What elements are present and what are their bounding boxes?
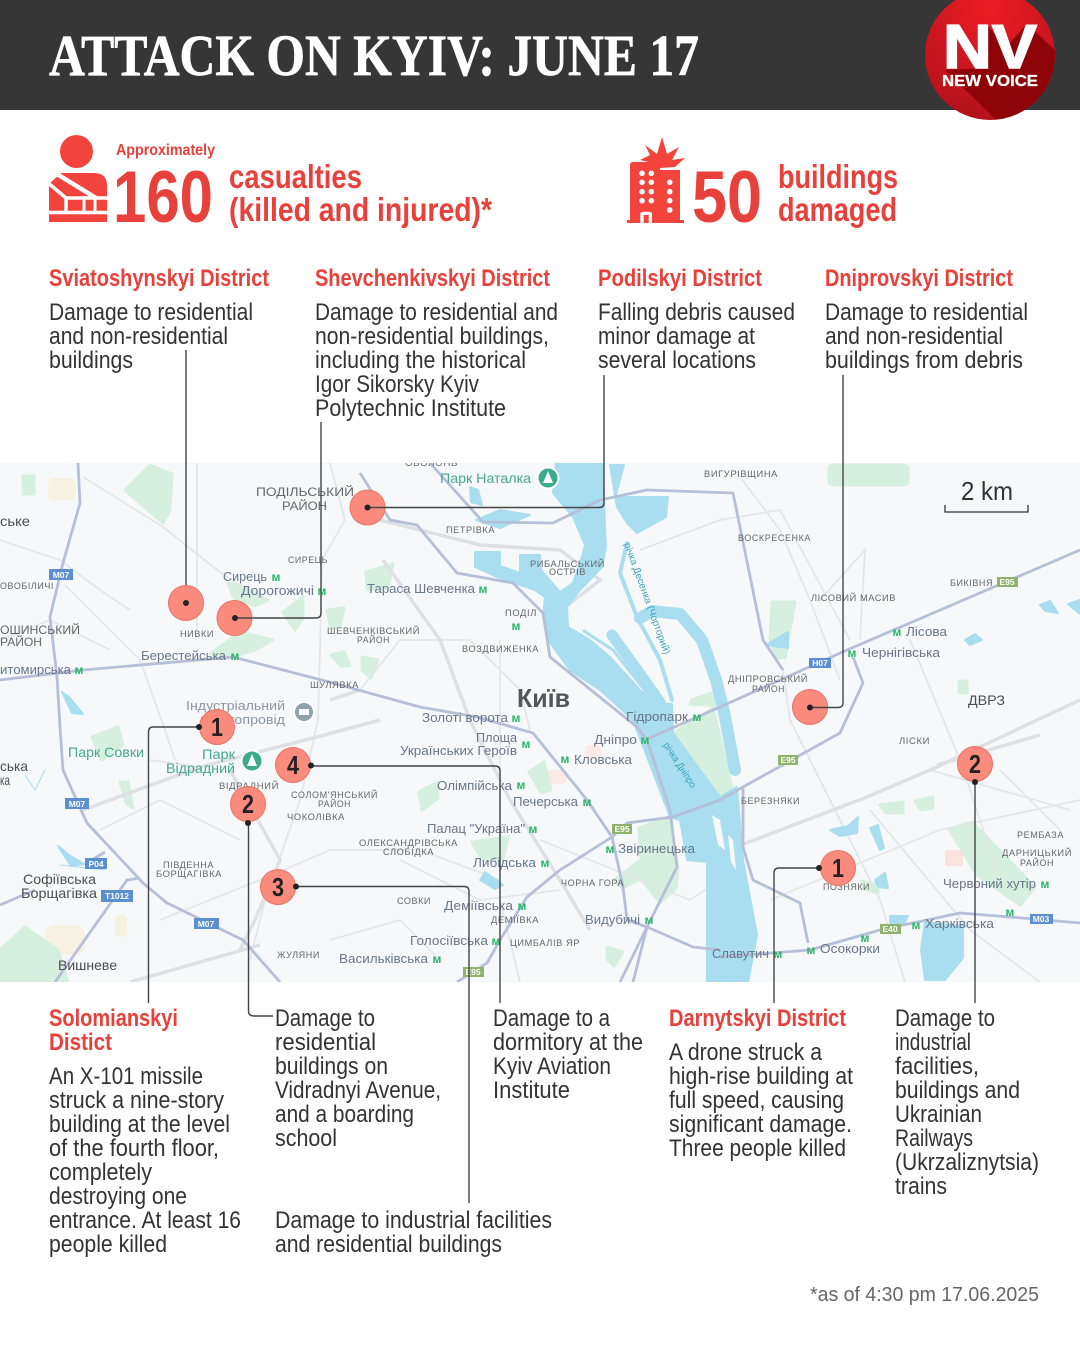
panel: Solomianskyi District: completely	[49, 1159, 152, 1186]
map place labels: ДЕМІЇВКА	[491, 915, 539, 926]
marker 3: industrial facilities	[260, 870, 469, 1203]
beige urban patches	[45, 478, 963, 955]
panel: Darnytskyi District: A drone struck a	[669, 1039, 823, 1066]
text: aviation institute damage	[493, 1005, 643, 1104]
panel: Solomianskyi District: of the fourth floor,	[49, 1135, 219, 1162]
map place labels: ЛІСОВИЙ МАСИВ	[811, 592, 896, 604]
panel: Solomianskyi District: Distict	[49, 1029, 112, 1056]
road number badges: М07	[198, 919, 215, 929]
icon: damaged building	[627, 137, 685, 223]
map place labels: Парк	[202, 746, 236, 762]
map place labels: БИКІВНЯ	[950, 578, 993, 589]
scale bar: 2 km	[945, 476, 1028, 512]
map place labels: Індустріальний	[186, 698, 285, 713]
map place labels: ОШИНСЬКИЙ	[0, 622, 80, 637]
panel: Podilskyi District: minor damage at	[598, 323, 755, 350]
map place labels: ДНІПРОВСЬКИЙ	[728, 673, 808, 685]
map place labels: Чернігівська	[862, 645, 941, 660]
text: Vidradnyi damage: Damage to	[275, 1005, 375, 1032]
road number badges: Т1012	[105, 891, 129, 901]
metro station marks: м	[433, 952, 442, 966]
map place labels: Голосіївська	[410, 933, 489, 948]
map place labels: РИБАЛЬСЬКИЙ	[530, 558, 605, 570]
panel: Shevchenkivskyi District: including the historical	[315, 347, 526, 374]
parks	[0, 465, 1035, 982]
map place labels: Сирець	[223, 569, 267, 584]
stat: buildings	[627, 137, 898, 238]
map place labels: Площа	[476, 730, 518, 745]
metro station marks: м	[512, 619, 521, 633]
metro station marks: м	[912, 918, 921, 932]
text: aviation institute damage: Kyiv Aviation	[493, 1053, 611, 1080]
text: aviation institute damage: Damage to a	[493, 1005, 611, 1032]
text: Vidradnyi damage: buildings on	[275, 1053, 388, 1080]
map place labels: Осокорки	[820, 941, 880, 956]
text: aviation institute damage: dormitory at the	[493, 1029, 643, 1056]
metro station marks: м	[641, 733, 650, 747]
map place labels: ОСТРІВ	[549, 567, 586, 578]
map place labels: річка Дніпро	[660, 741, 698, 791]
road number badges: Н07	[812, 658, 828, 668]
text: industrial facilities damage: Damage to industrial facilities	[275, 1207, 552, 1234]
map place labels: РАЙОН	[357, 634, 390, 646]
map place labels: ПІВДЕННА	[163, 860, 214, 871]
panel: Solomianskyi District: destroying one	[49, 1183, 187, 1210]
panel: Darnytskyi District: high-rise building at	[669, 1063, 853, 1090]
map place labels: Дніпро	[594, 732, 637, 747]
buildings damaged text: buildings	[778, 158, 898, 195]
map place labels: ОБОЛОНЬ	[405, 458, 458, 469]
metro station marks: м	[318, 584, 327, 598]
road number badges: Е95	[999, 577, 1015, 587]
map place labels: ЧОКОЛІВКА	[287, 812, 345, 823]
map place labels: СОЛОМ'ЯНСЬКИЙ	[291, 789, 378, 801]
map place labels: Дорогожичі	[241, 583, 314, 598]
metro station marks: м	[583, 795, 592, 809]
title: ATTACK ON KYIV: JUNE 17	[49, 23, 699, 88]
metro station marks: м	[561, 752, 570, 766]
panel: Dniprovskyi District: Dniprovskyi District	[825, 265, 1013, 292]
map place labels: ська	[0, 758, 28, 774]
panel: Darnytskyi District: Darnytskyi District	[669, 1005, 846, 1032]
map place labels: Харківська	[925, 916, 995, 931]
metro station marks: м	[693, 710, 702, 724]
map place labels: Тараса Шевченка	[367, 581, 476, 596]
road number badges: М07	[69, 799, 86, 809]
map place labels: ОЛЕКСАНДРІВСЬКА	[359, 838, 458, 849]
map place labels: ПЕТРІВКА	[446, 525, 495, 536]
panel: Podilskyi District: Podilskyi District	[598, 265, 762, 292]
panel: Solomianskyi District: building at the level	[49, 1111, 230, 1138]
marker 1: Darnytskyi	[774, 850, 856, 1003]
road number badges: Е95	[614, 824, 630, 834]
scale bar: 2 km: 2 km	[961, 476, 1013, 506]
metro station marks: м	[75, 663, 84, 677]
metro station marks: м	[861, 931, 870, 945]
metro station marks: м	[522, 737, 531, 751]
marker 1: Darnytskyi: 1	[832, 853, 844, 883]
map place labels: ШЕВЧЕНКІВСЬКИЙ	[327, 625, 420, 637]
text: railway damage	[895, 1005, 1039, 1200]
text: Vidradnyi damage: school	[275, 1125, 337, 1152]
map of Kyiv	[0, 458, 1080, 982]
marker 1: Solomianskyi	[148, 710, 234, 1003]
panel: Podilskyi District	[598, 265, 795, 374]
map place labels: ське	[0, 513, 30, 529]
panel: Solomianskyi District: people killed	[49, 1231, 167, 1258]
map place labels: Деміївська	[444, 898, 514, 913]
metro station marks: м	[645, 913, 654, 927]
map place labels: ШУЛЯВКА	[310, 680, 359, 691]
text: Vidradnyi damage	[275, 1005, 441, 1152]
metro station marks: м	[529, 822, 538, 836]
metro station marks: м	[1041, 877, 1050, 891]
map place labels: БОРЩАГІВКА	[156, 869, 222, 880]
connector: Dniprovskyi	[792, 375, 843, 724]
logo: NV New Voice	[925, 0, 1060, 122]
map place labels: ДВРЗ	[968, 692, 1005, 708]
map place labels: ЖУЛЯНИ	[277, 950, 320, 961]
panel: Sviatoshynskyi District: buildings	[49, 347, 133, 374]
map place labels: Лісова	[906, 624, 948, 639]
panel: Solomianskyi District: struck a nine-story	[49, 1087, 224, 1114]
panel: Dniprovskyi District: and non-residential	[825, 323, 1003, 350]
map place labels: Либідська	[473, 855, 537, 870]
map place labels: РАЙОН	[318, 798, 351, 810]
panel: Shevchenkivskyi District: Igor Sikorsky Kyiv	[315, 371, 479, 398]
map place labels: Берестейська	[141, 648, 227, 663]
panel: Darnytskyi District: Three people killed	[669, 1135, 846, 1162]
panel: Podilskyi District: Falling debris caused	[598, 299, 795, 326]
metro station marks: м	[231, 649, 240, 663]
map place labels: Вишневе	[58, 957, 117, 973]
logo: NV New Voice: NEW VOICE	[942, 73, 1038, 90]
road number badges: Е95	[465, 967, 481, 977]
metro station marks: м	[1006, 905, 1015, 919]
map place labels: РАЙОН	[1020, 857, 1054, 869]
panel: Sviatoshynskyi District	[49, 265, 269, 374]
map place labels: ПОДІЛ	[505, 608, 537, 619]
map place labels: БЕРЕЗНЯКИ	[741, 796, 800, 807]
road number badges: Е95	[780, 755, 796, 765]
metro station marks: м	[517, 778, 526, 792]
approximately label: Approximately	[116, 142, 215, 159]
text: Vidradnyi damage: Vidradnyi Avenue,	[275, 1077, 441, 1104]
map place labels: ЛІСКИ	[899, 736, 930, 747]
map place labels: итомирська	[0, 662, 72, 677]
metro station marks: м	[272, 570, 281, 584]
map place labels: ПОЗНЯКИ	[823, 882, 870, 893]
stat: casualties	[47, 135, 492, 238]
text: Vidradnyi damage: residential	[275, 1029, 376, 1056]
map place labels: ДАРНИЦЬКИЙ	[1002, 847, 1072, 859]
metro station marks: м	[512, 711, 521, 725]
panel: Sviatoshynskyi District: and non-residential	[49, 323, 228, 350]
map place labels: РАЙОН	[752, 683, 785, 695]
map place labels: Славутич	[712, 946, 769, 961]
map place labels: СЛОБІДКА	[383, 847, 434, 858]
metro station marks: м	[518, 899, 527, 913]
panel: Darnytskyi District: full speed, causing	[669, 1087, 844, 1114]
number 160: 160	[113, 157, 213, 238]
icon: injured person	[47, 135, 108, 222]
panel: Shevchenkivskyi District: Damage to residential and	[315, 299, 558, 326]
map place labels: Парк Наталка	[440, 470, 531, 486]
metro station marks: м	[893, 625, 902, 639]
panel: Solomianskyi District: An X-101 missile	[49, 1063, 203, 1090]
map place labels: ОВОБІЛИЧІ	[0, 581, 54, 592]
marker 4: Aviation Institute: 4	[287, 750, 299, 780]
map place labels: СОВКИ	[397, 896, 431, 907]
text: Vidradnyi damage: and a boarding	[275, 1101, 414, 1128]
map place labels: Палац "Україна"	[427, 821, 525, 836]
map place labels: Печерська	[513, 794, 579, 809]
metro station marks: м	[807, 943, 816, 957]
text: aviation institute damage: Institute	[493, 1077, 570, 1104]
map place labels: ВІДРАДНИЙ	[219, 780, 279, 792]
map place labels: Червоний хутір	[943, 876, 1036, 891]
map place labels: СИРЕЦЬ	[288, 555, 328, 566]
road number badges: Е40	[882, 924, 898, 934]
map place labels: НИВКИ	[180, 629, 214, 640]
map place labels: ЧОРНА ГОРА	[561, 878, 624, 889]
map place labels: Українських Героїв	[400, 743, 517, 758]
river islands	[712, 815, 736, 870]
text: railway damage: (Ukrzaliznytsia)	[895, 1149, 1039, 1176]
map place labels: Золоті ворота	[422, 710, 509, 725]
marker 3: industrial facilities: 3	[272, 872, 284, 902]
map place labels: Кловська	[574, 752, 633, 767]
road number badges	[49, 569, 1053, 977]
map place labels: Борщагівка	[21, 885, 97, 901]
panel: Shevchenkivskyi District: Polytechnic Institute	[315, 395, 506, 422]
road number badges: Р04	[88, 859, 104, 869]
map place labels: РАЙОН	[282, 498, 327, 513]
map place labels: Парк Совки	[68, 744, 144, 760]
metro station marks	[75, 570, 1050, 966]
connector: Podilskyi	[350, 375, 604, 525]
text: railway damage: facilities,	[895, 1053, 979, 1080]
panel: Solomianskyi District: Solomianskyi	[49, 1005, 178, 1032]
marker 2: Darnytskyi rail	[958, 746, 992, 1003]
map place labels: ЦИМБАЛІВ ЯР	[510, 938, 580, 949]
text: railway damage: trains	[895, 1173, 947, 1200]
buildings damaged text: damaged	[778, 191, 897, 228]
map place labels: шляхопровід	[200, 712, 285, 727]
panel: Dniprovskyi District	[825, 265, 1028, 374]
text: industrial facilities damage	[275, 1207, 552, 1258]
marker 2: Darnytskyi rail: 2	[969, 749, 981, 779]
map place labels: ПОДІЛЬСЬКИЙ	[256, 484, 354, 499]
map place labels: ВОЗДВИЖЕНКА	[462, 644, 539, 655]
map place labels: ВОСКРЕСЕНКА	[738, 533, 811, 544]
logo: NV New Voice: NV	[943, 13, 1037, 82]
panel: Shevchenkivskyi District	[315, 265, 558, 422]
panel: Solomianskyi District: entrance. At least 16	[49, 1207, 241, 1234]
metro station marks: м	[606, 842, 615, 856]
text: industrial facilities damage: and residential buildings	[275, 1231, 502, 1258]
header bar	[0, 0, 1080, 110]
casualties text	[229, 158, 492, 228]
panel: Darnytskyi District: significant damage.	[669, 1111, 852, 1138]
panel: Shevchenkivskyi District: Shevchenkivskyi District	[315, 265, 550, 292]
connector: Shevchenkivskyi	[217, 422, 321, 636]
map place labels: ка	[0, 772, 10, 788]
map place labels: Гідропарк	[626, 709, 688, 724]
map place labels: РЕМБАЗА	[1017, 830, 1064, 841]
minor roads	[0, 463, 1080, 982]
road number badges: М03	[1033, 914, 1050, 924]
road number badges: М07	[53, 570, 70, 580]
rail lines and major streets	[83, 520, 1080, 982]
panel: Shevchenkivskyi District: non-residential buildings,	[315, 323, 549, 350]
map place labels: Київ	[517, 683, 570, 713]
metro station marks: м	[774, 947, 783, 961]
marker 2: Vidradnyi Avenue: 2	[242, 789, 254, 819]
text: railway damage: buildings and	[895, 1077, 1020, 1104]
map place labels: Відрадний	[166, 760, 235, 776]
map place labels: РАЙОН	[0, 634, 42, 649]
casualties text: casualties	[229, 158, 362, 195]
metro station marks: м	[848, 646, 857, 660]
panel: Dniprovskyi District: buildings from debris	[825, 347, 1023, 374]
panel: Dniprovskyi District: Damage to residential	[825, 299, 1028, 326]
map place labels: Васильківська	[339, 951, 429, 966]
text: railway damage: industrial	[895, 1029, 971, 1056]
text: railway damage: Damage to	[895, 1005, 995, 1032]
number 50: 50	[692, 157, 762, 238]
buildings damaged text	[778, 158, 898, 228]
casualties text: (killed and injured)*	[229, 191, 492, 228]
metro station marks: м	[492, 934, 501, 948]
icons: park markers	[240, 466, 560, 772]
connector: Sviatoshynskyi	[168, 350, 204, 620]
metro station marks: м	[479, 582, 488, 596]
text: railway damage: Ukrainian	[895, 1101, 982, 1128]
panel: Sviatoshynskyi District: Sviatoshynskyi District	[49, 265, 269, 292]
text: railway damage: Railways	[895, 1125, 973, 1152]
map place labels	[0, 458, 1072, 973]
panel: Sviatoshynskyi District: Damage to residential	[49, 299, 253, 326]
highways	[0, 463, 1080, 982]
marker 1: Solomianskyi: 1	[211, 712, 223, 742]
marker 4: Aviation Institute	[276, 748, 500, 1003]
panel: Solomianskyi District	[49, 1005, 241, 1258]
map place labels: Софіївська	[23, 871, 96, 887]
metro station marks: м	[541, 856, 550, 870]
panel: Podilskyi District: several locations	[598, 347, 756, 374]
marker 2: Vidradnyi Avenue	[230, 786, 273, 1016]
map place labels: річка Десенка (Чорторий)	[621, 541, 672, 656]
map place labels: Видубичі	[585, 912, 640, 927]
map place labels: ВИГУРІВЩИНА	[704, 469, 778, 480]
map place labels: Звіринецька	[618, 841, 696, 856]
panel: Darnytskyi District	[669, 1005, 853, 1162]
footnote: *as of 4:30 pm 17.06.2025	[810, 1284, 1039, 1306]
map place labels: Олімпійська	[437, 778, 513, 793]
water: river Dnipro	[25, 463, 1080, 982]
